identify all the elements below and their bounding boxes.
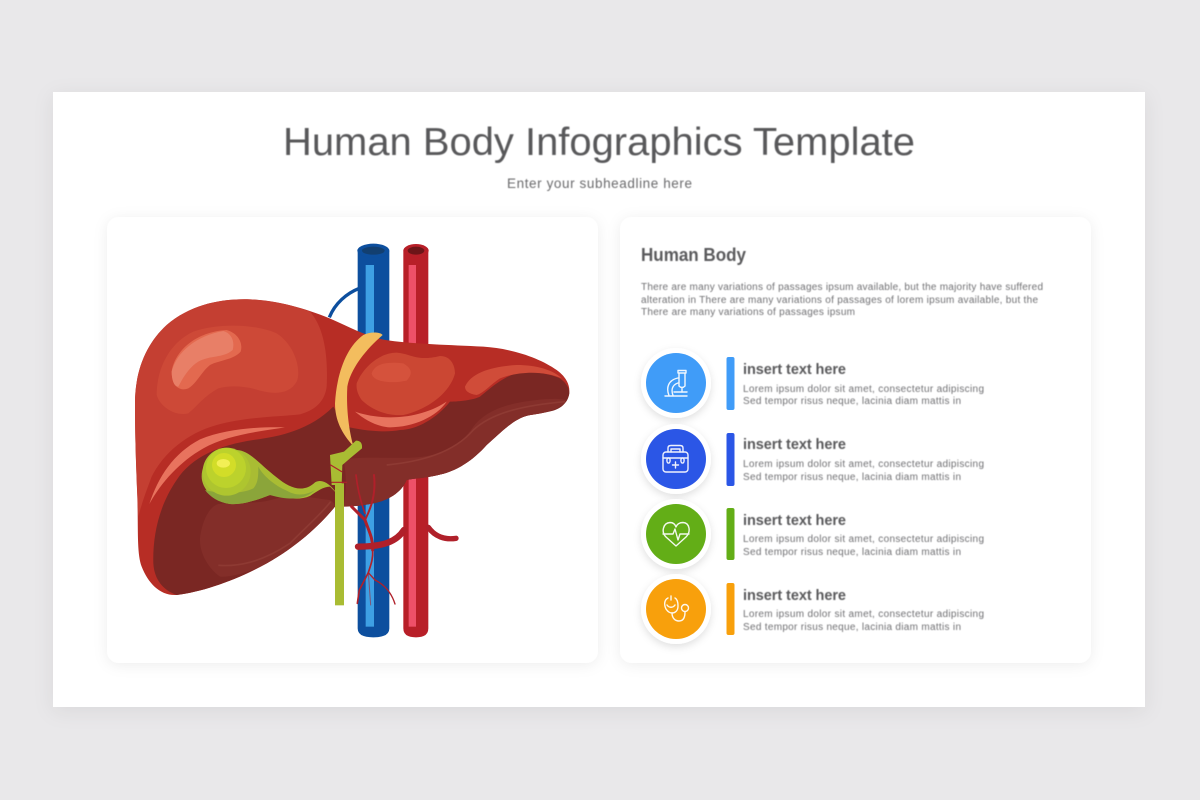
subtitle: Enter your subheadline here	[507, 176, 692, 191]
yellow ligament	[335, 332, 383, 446]
item text: Sed tempor risus neque, lacinia diam mattis in	[743, 547, 961, 558]
underside streak left	[218, 502, 331, 566]
list item 1: microscope	[641, 348, 984, 418]
item bar	[726, 508, 734, 560]
item text	[743, 588, 984, 633]
item text: insert text here	[743, 437, 846, 453]
blue vein	[357, 244, 389, 637]
item text	[743, 362, 984, 407]
panel paragraph	[641, 282, 1043, 318]
panel: text and list	[620, 217, 1091, 663]
gallbladder	[202, 448, 337, 504]
item bar	[726, 433, 734, 486]
red artery	[403, 244, 429, 637]
item text: Sed tempor risus neque, lacinia diam mattis in	[743, 622, 961, 633]
icon: medical kit	[663, 446, 688, 472]
upper right lobe shading	[135, 299, 327, 517]
panel paragraph: There are many variations of passages ipsum available, but the majority have suffered	[641, 282, 1043, 293]
list item 4: stethoscope	[641, 574, 984, 644]
item bar	[726, 357, 734, 410]
highlight	[172, 330, 241, 389]
panel paragraph: There are many variations of passages ipsum	[641, 307, 855, 318]
middle lobe	[357, 353, 455, 415]
bile duct	[330, 441, 362, 605]
blue vein branch	[329, 288, 359, 317]
list item 2: medical kit	[641, 424, 984, 494]
curved highlight left	[149, 427, 285, 504]
item text: Lorem ipsum dolor sit amet, consectetur adipiscing	[743, 384, 984, 395]
icon: stethoscope	[665, 596, 688, 621]
slide card	[53, 92, 1145, 707]
item text: insert text here	[743, 513, 846, 529]
lighter underside right	[343, 399, 567, 507]
panel heading: Human Body	[641, 245, 746, 265]
icon: microscope	[665, 370, 687, 396]
dark underside	[153, 372, 569, 595]
item text	[743, 437, 984, 483]
item text: Sed tempor risus neque, lacinia diam mattis in	[743, 472, 961, 483]
item text	[743, 513, 984, 558]
liver anatomy illustration	[135, 244, 569, 637]
artery branches	[331, 465, 456, 605]
light lobe patch	[157, 326, 298, 414]
list item 3: heart	[641, 499, 984, 569]
underside streak right	[387, 402, 565, 465]
item text: Sed tempor risus neque, lacinia diam mattis in	[743, 396, 961, 407]
item text: Lorem ipsum dolor sit amet, consectetur adipiscing	[743, 609, 984, 620]
item bar	[726, 583, 734, 635]
title: Human Body Infographics Template	[283, 121, 915, 164]
panel paragraph: alteration in There are many variations of passages of lorem ipsum available, but the	[641, 295, 1038, 306]
icon: heart with pulse	[663, 522, 689, 546]
middle lobe crescent	[355, 402, 447, 427]
item text: Lorem ipsum dolor sit amet, consectetur adipiscing	[743, 459, 984, 470]
lighter underside left	[200, 496, 335, 577]
item text: insert text here	[743, 588, 846, 604]
panel: liver illustration	[107, 217, 598, 663]
item text: insert text here	[743, 362, 846, 378]
liver body	[135, 299, 569, 595]
item text: Lorem ipsum dolor sit amet, consectetur adipiscing	[743, 534, 984, 545]
right tip highlight	[465, 365, 562, 395]
